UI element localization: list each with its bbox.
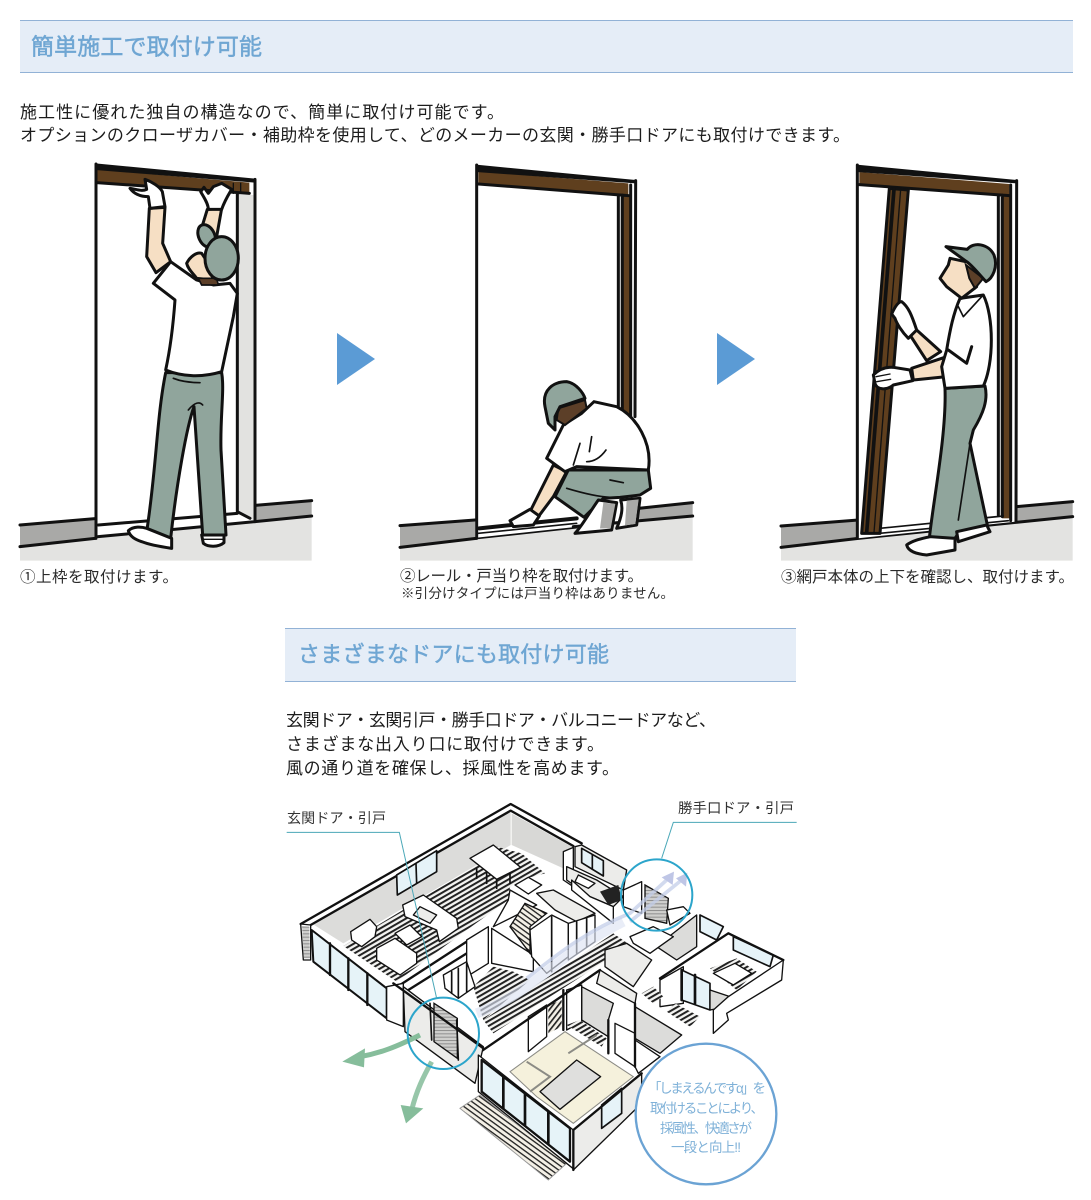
partition wall — [400, 942, 467, 990]
section header: easy installation — [20, 20, 1073, 73]
description text: 風の通り道を確保し、採風性を高めます。 — [286, 759, 619, 778]
bottom deck — [460, 1095, 567, 1180]
glove — [510, 509, 539, 527]
trousers — [929, 386, 987, 538]
section header: various doors: さまざまなドアにも取付け可能 — [298, 642, 609, 667]
trousers — [555, 470, 651, 517]
shoes — [575, 500, 617, 533]
dining floor — [497, 847, 545, 888]
intro text: オプションのクローザカバー・補助枠を使用して、どのメーカーの玄関・勝手口ドアにも取付けできます。 — [20, 125, 850, 145]
trousers — [147, 373, 226, 538]
island and long counter — [493, 877, 595, 927]
dining table — [470, 845, 521, 888]
tatami room — [510, 1032, 633, 1123]
description text — [286, 711, 716, 778]
callout text: 「しまえるんですα」を — [648, 1081, 766, 1096]
description text: さまざまな出入り口に取付けできます。 — [286, 734, 604, 754]
left arm — [147, 207, 171, 273]
lower hall floor — [473, 967, 530, 1020]
arrow: step 1 to 2 — [337, 333, 375, 385]
caption: step 2: ※引分けタイプには戸当り枠はありません。 — [401, 586, 674, 601]
shoes — [957, 525, 990, 542]
sofas — [351, 895, 458, 975]
house silhouette — [301, 804, 785, 1170]
leader lines — [287, 822, 797, 998]
living floor — [343, 853, 510, 982]
label: back door: 勝手口ドア・引戸 — [678, 800, 794, 817]
illustration: cutaway house with airflow — [287, 804, 797, 1184]
intro text — [20, 103, 850, 145]
outflow arrow left — [342, 1035, 420, 1067]
section header: various doors — [285, 628, 796, 682]
callout text: 一段と向上!! — [671, 1140, 741, 1155]
kitchen door and fridge — [623, 882, 690, 925]
outflow arrow down — [401, 1062, 432, 1123]
caption: step 3: ③網戸本体の上下を確認し、取付けます。 — [781, 568, 1074, 586]
shirt — [547, 402, 649, 472]
callout text: 取付けることにより、 — [650, 1101, 764, 1116]
right arm — [200, 208, 222, 237]
middle rooms — [478, 970, 682, 1073]
head — [940, 258, 977, 298]
section header: easy installation: 簡単施工で取付け可能 — [31, 34, 262, 60]
right rooms — [605, 915, 783, 1033]
illustration: step 2 worker fitting rail — [400, 165, 693, 561]
airflow bands — [477, 872, 687, 1013]
callout text: 採風性、快適さが — [660, 1121, 752, 1136]
leaning screen door — [862, 188, 908, 533]
arm — [530, 465, 567, 517]
shirt — [153, 262, 237, 376]
kitchen — [563, 845, 627, 923]
gloves — [892, 302, 917, 338]
entry wall and door — [393, 983, 483, 1083]
arms — [910, 330, 941, 361]
illustration: step 3 worker fitting screen door — [781, 165, 1073, 561]
corridor floor — [483, 933, 630, 1033]
label: front door: 玄関ドア・引戸 — [287, 810, 386, 826]
highlight circle: back door — [621, 859, 692, 931]
arrow: step 2 to 3 — [717, 333, 755, 385]
description text: 玄関ドア・玄関引戸・勝手口ドア・バルコニードアなど、 — [286, 711, 716, 730]
front-left windows wall — [301, 924, 403, 1027]
shirt — [942, 295, 991, 388]
illustration: step 1 worker fitting top frame — [20, 163, 312, 561]
shoes — [128, 527, 172, 548]
gloves — [130, 179, 165, 208]
caption: step 1: ①上枠を取付けます。 — [20, 568, 178, 586]
back window — [397, 851, 437, 895]
caption: step 2 — [400, 567, 674, 601]
bottom-front wall with windows — [478, 1055, 642, 1170]
head — [187, 253, 213, 280]
highlight circle: entry door — [408, 998, 479, 1069]
callout text — [648, 1081, 766, 1155]
stairs and closets — [443, 903, 595, 998]
callout circle — [636, 1044, 776, 1184]
caption: step 2: ②レール・戸当り枠を取付けます。 — [400, 567, 643, 585]
cap and hair — [557, 400, 587, 425]
intro text: 施工性に優れた独自の構造なので、簡単に取付け可能です。 — [20, 103, 504, 122]
back wall interior — [312, 811, 511, 943]
